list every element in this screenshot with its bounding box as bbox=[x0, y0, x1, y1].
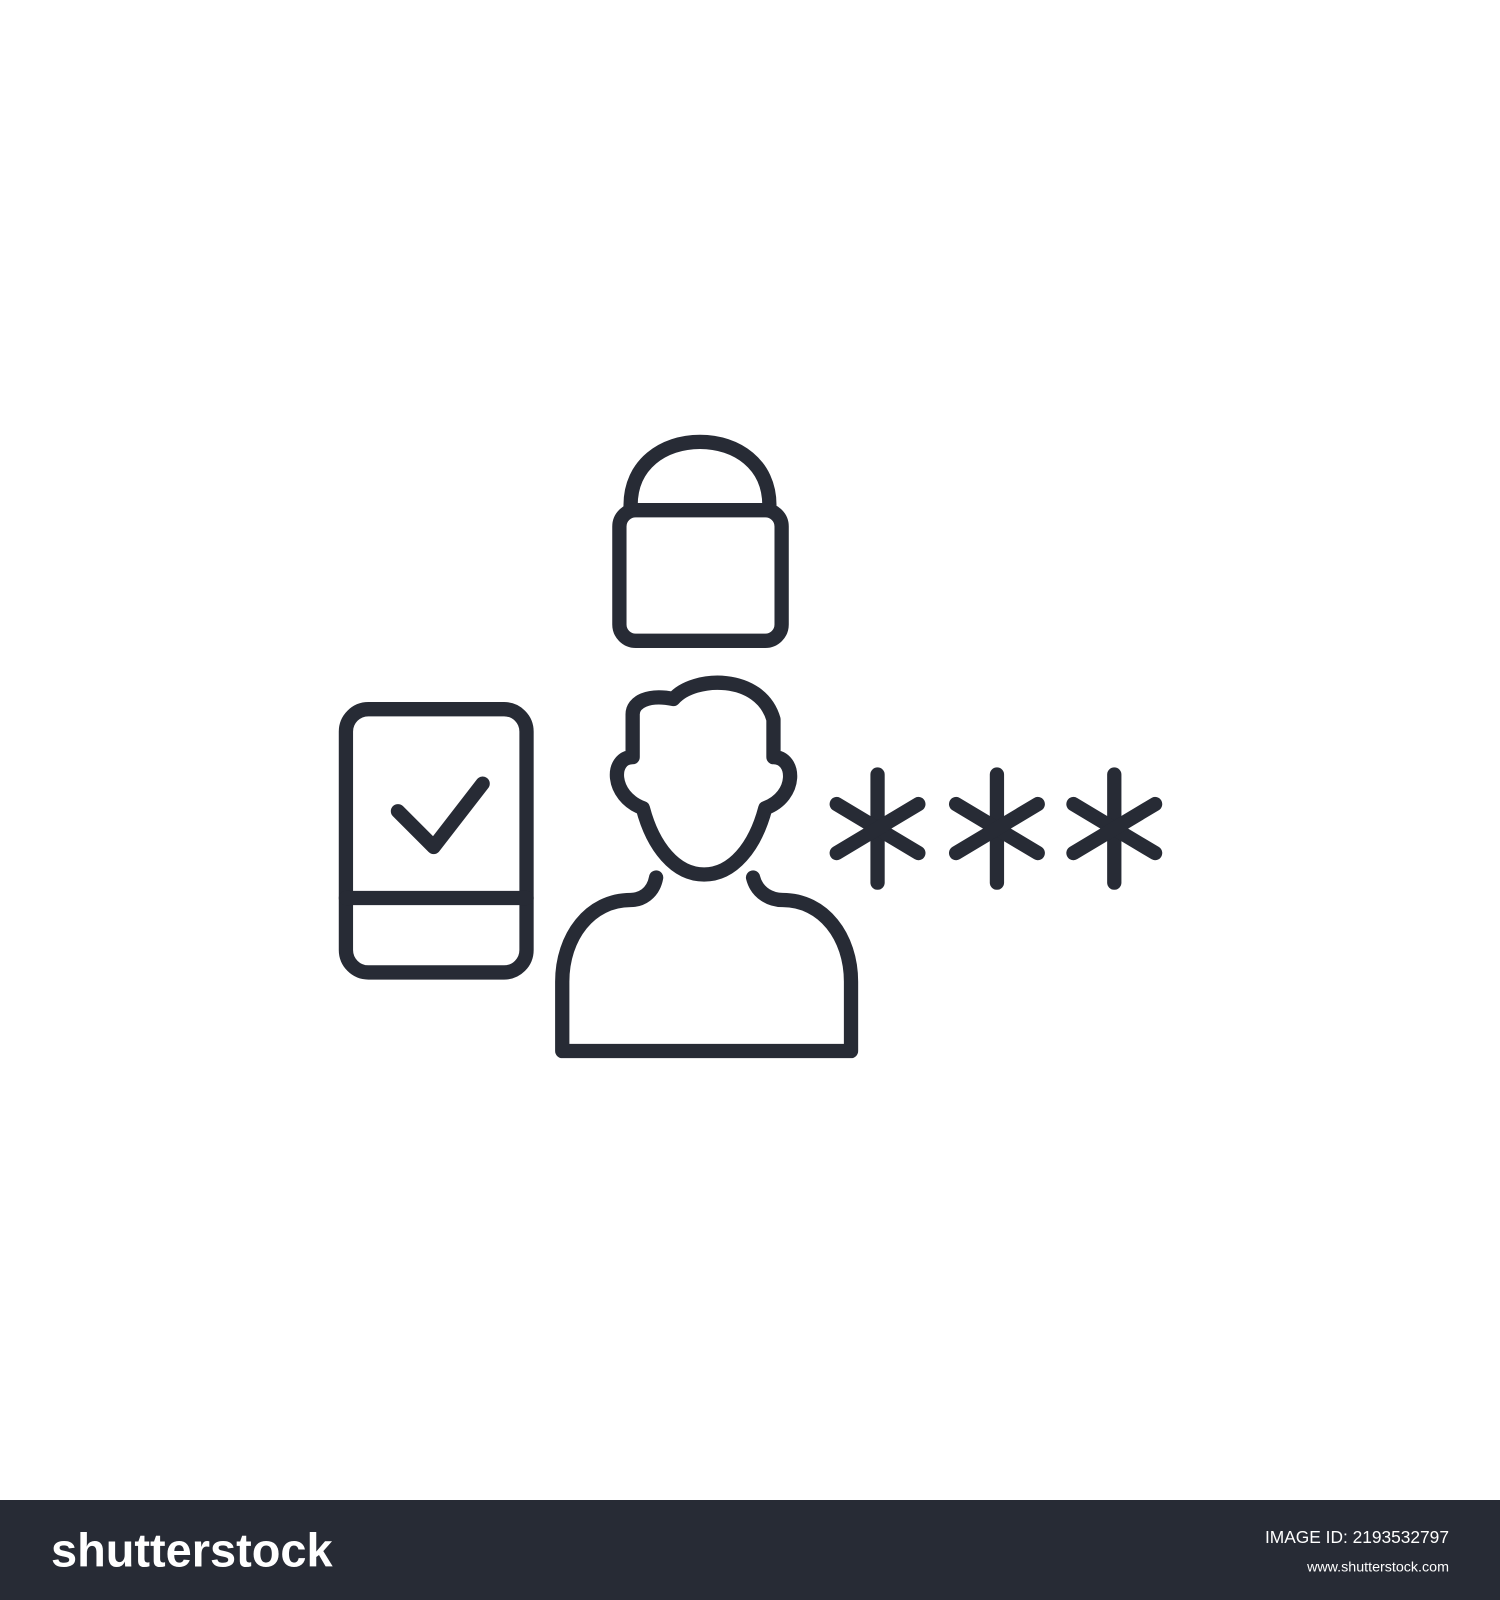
icon: padlock bbox=[619, 442, 782, 641]
footer url: www.shutterstock.com bbox=[1306, 1559, 1449, 1575]
icon: person bbox=[562, 683, 851, 1051]
icon: phone with check bbox=[346, 709, 527, 972]
footer image id: IMAGE ID: 2193532797 bbox=[1265, 1527, 1449, 1547]
icon: asterisks bbox=[837, 774, 1155, 883]
footer logo text: shutterstock bbox=[51, 1524, 334, 1576]
footer bar bbox=[0, 1500, 1500, 1600]
